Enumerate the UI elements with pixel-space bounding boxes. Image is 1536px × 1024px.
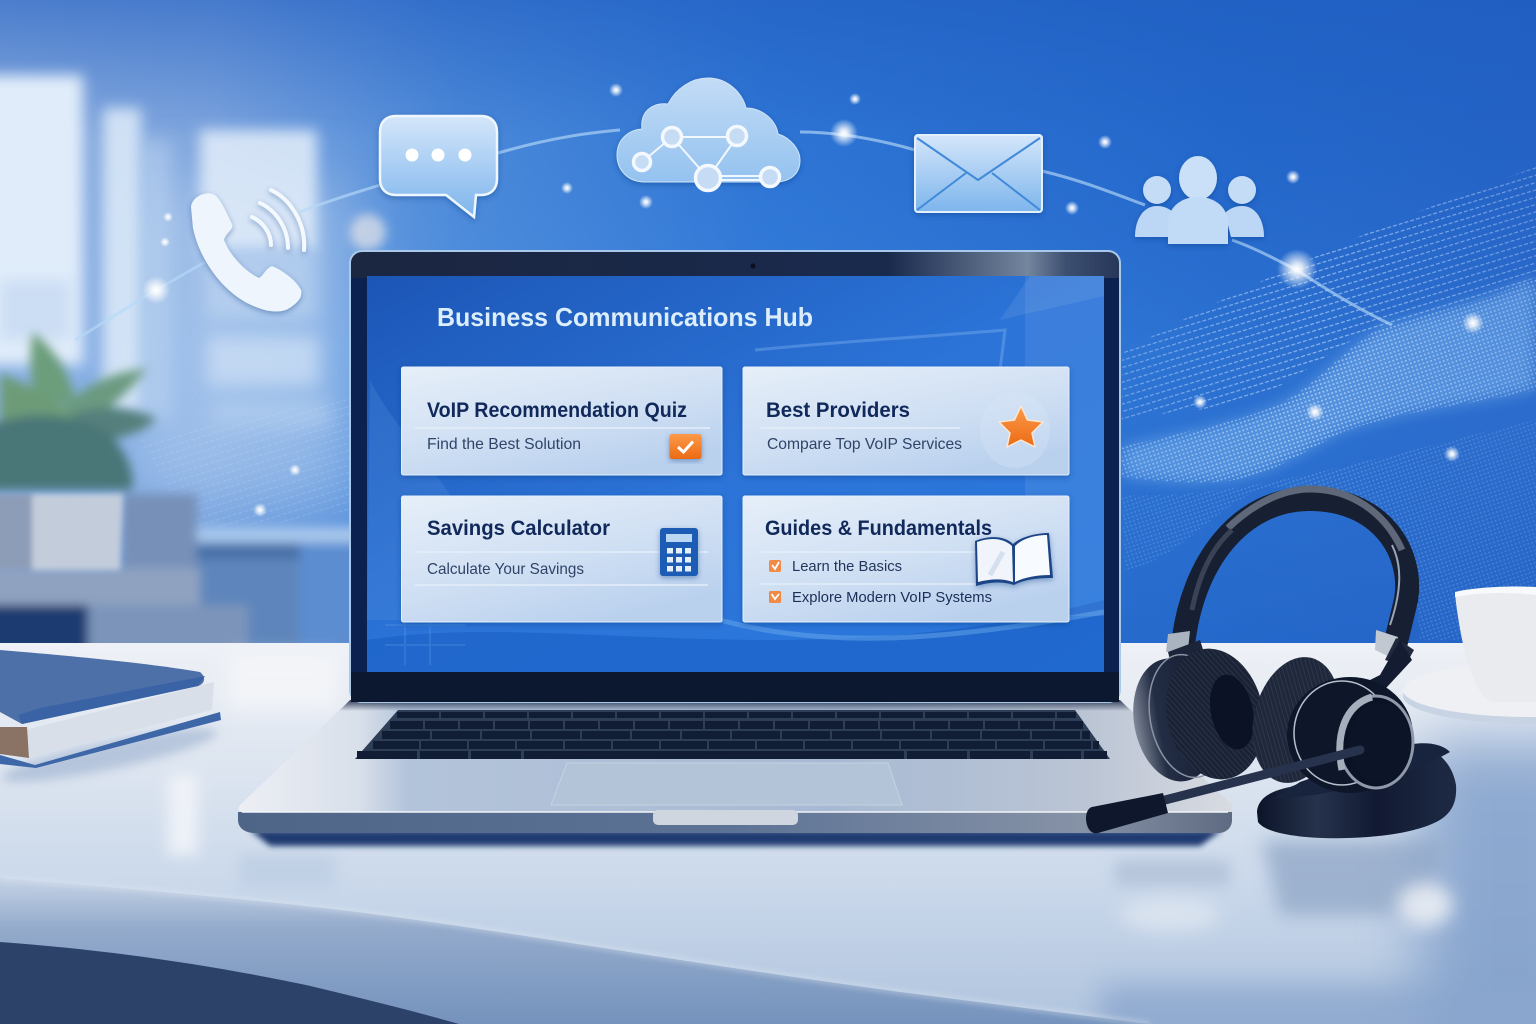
wave band: dots [1122,277,1536,483]
icon: envelope [915,135,1042,212]
card heading: Savings Calculator [427,516,611,540]
blurred plant [0,332,157,570]
blurred office backdrop [0,75,386,655]
list item: explore modern VoIP systems: Explore Modern VoIP Systems [792,590,992,606]
icon: orange check [670,434,702,459]
icon: chat bubble [380,116,497,217]
icon: calculator [660,528,698,576]
keyboard [355,710,1110,759]
screen [367,276,1104,672]
desk edge highlight [0,878,1150,1024]
headset stand [1257,743,1456,838]
lower dots [1122,420,1536,640]
headset [1086,489,1456,838]
card text: Calculate Your Savings [427,561,584,578]
network links [642,137,770,180]
icon: cloud network [617,78,800,190]
icon: open book [975,533,1053,586]
panel: VoIP recommendation quiz [402,367,722,475]
laptop [238,251,1232,833]
headband sliders [1166,630,1414,668]
window left [0,75,83,365]
lower furniture [0,494,360,655]
window middle [103,108,141,413]
panel: best providers [743,367,1069,475]
panel: guides and fundamentals [743,496,1069,622]
screen title: Business Communications Hub [437,302,813,332]
desk [0,643,1536,1024]
right ear cup [1240,640,1413,793]
notebook bottom cover [0,712,221,768]
network nodes [634,126,780,190]
desk reflection streak [168,775,198,855]
screen grid reflection [385,622,465,665]
panel: savings calculator [402,496,722,622]
laptop shadow [250,830,1222,846]
desk front edge [0,878,1150,1024]
notebook top cover [0,650,204,724]
wave band: soft glow [1122,277,1536,483]
wave band: lines [1122,167,1536,420]
backdrop particle mesh [140,395,350,527]
wave of light particles [1122,167,1536,640]
microphone boom [1165,750,1360,800]
desk bright highlight [228,655,338,710]
card text: Find the Best Solution [427,436,581,453]
card heading: Best Providers [766,398,910,422]
plant leaves [0,332,157,490]
headband [1183,489,1407,650]
webcam [750,264,756,268]
card heading: Guides & Fundamentals [765,516,992,540]
microphone foam tip [1086,793,1168,833]
plant pot [0,494,123,570]
laptop lid [350,251,1120,702]
list item: learn the basics: Learn the Basics [792,559,902,575]
front notch [653,810,798,825]
sparkles [142,83,1484,517]
notebook spine [0,727,29,758]
left ear cup [1124,639,1276,789]
icon: phone [191,190,304,311]
notebook pages [25,682,214,757]
laptop base [238,700,1232,833]
coffee cup and saucer [1403,587,1536,724]
card heading: VoIP Recommendation Quiz [427,398,687,422]
card text: Compare Top VoIP Services [767,436,962,453]
desk blue sheen [240,740,1536,1024]
notebook [0,650,221,792]
cloud shape [617,78,800,182]
connection arc [75,130,1392,340]
window right [200,130,317,250]
icon: star [999,406,1043,447]
desk dark front face [0,942,459,1024]
icon: people [1135,156,1264,244]
trackpad [551,763,902,805]
